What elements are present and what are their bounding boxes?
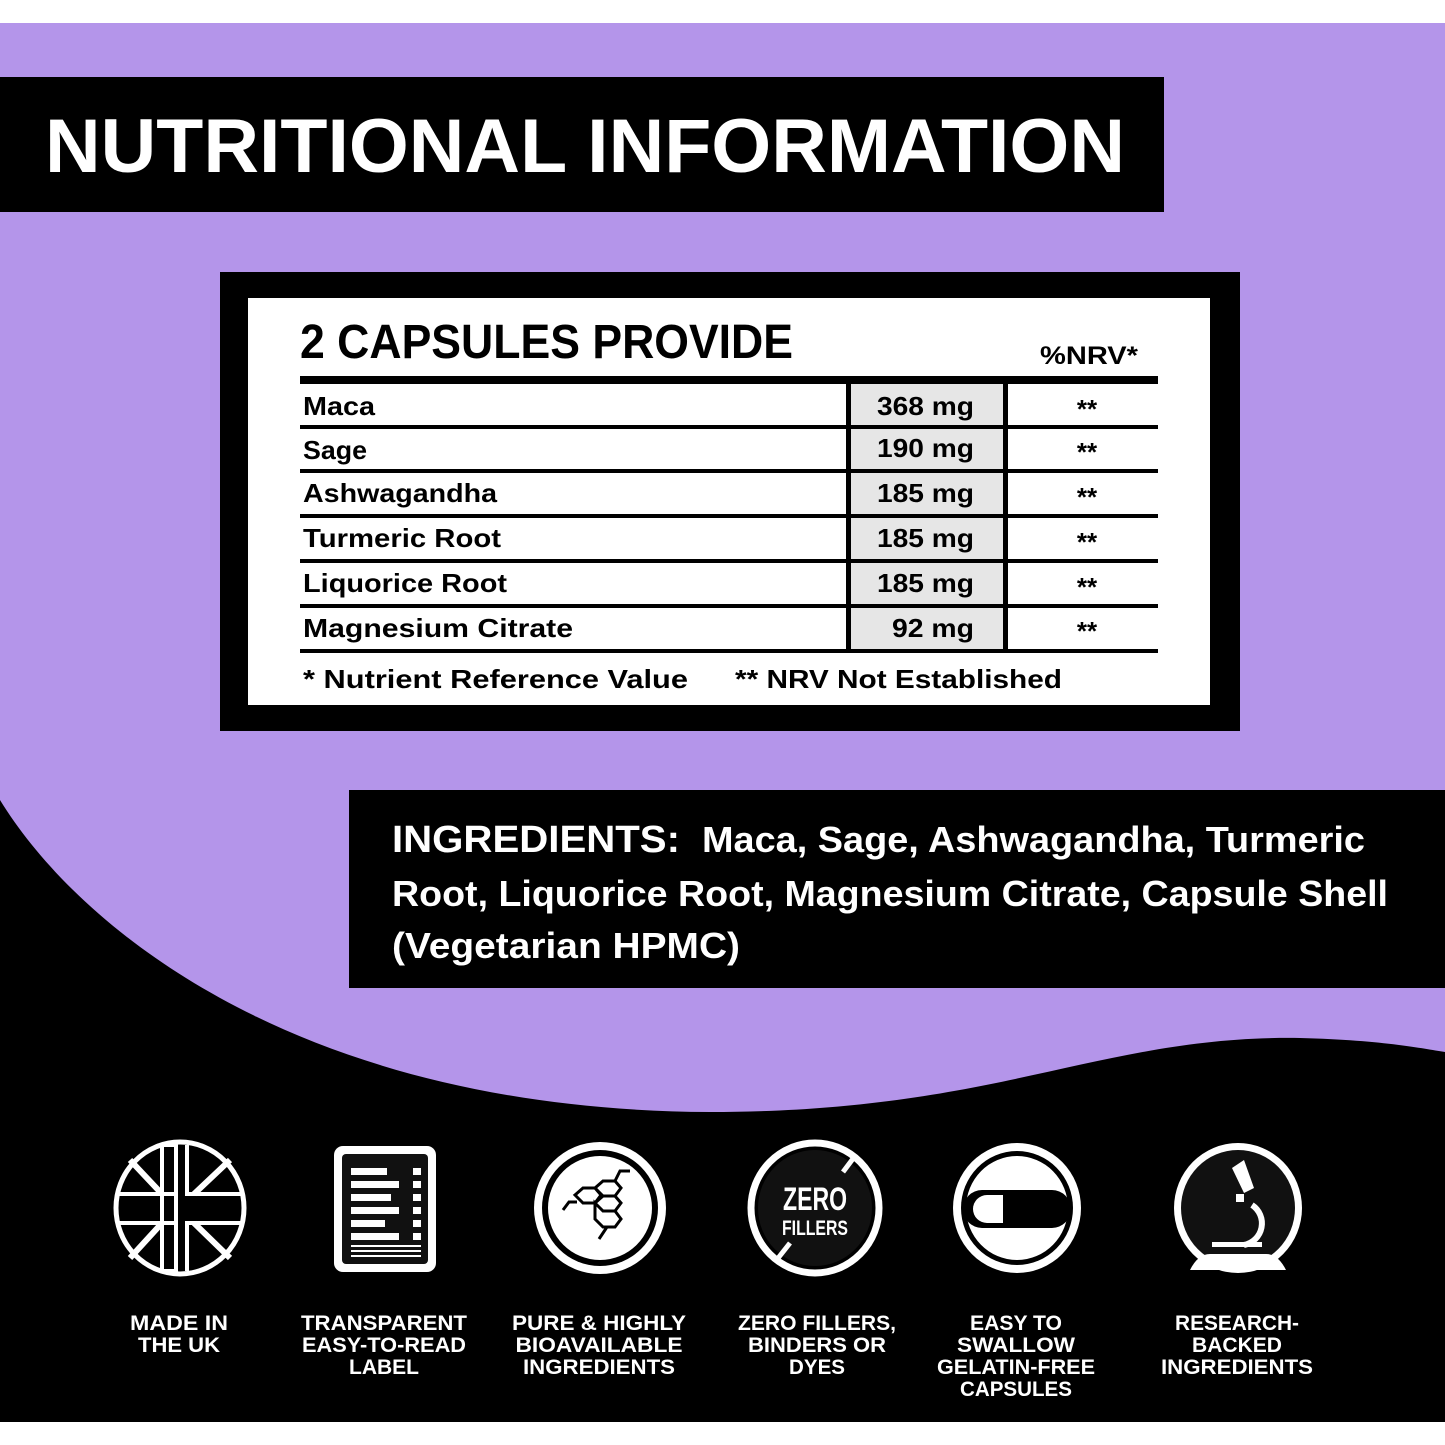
- feature labels: EASY-TO-READ: [302, 1334, 466, 1357]
- table rows: 92 mg: [892, 613, 974, 643]
- panel: ingredients: (Vegetarian HPMC): [392, 925, 740, 966]
- label: made in uk: MADE IN: [130, 1312, 228, 1335]
- feature labels: INGREDIENTS: [1161, 1356, 1313, 1379]
- table rows: 368 mg: [877, 391, 974, 421]
- feature labels: THE UK: [138, 1334, 220, 1357]
- table rows: 185 mg: [877, 478, 974, 508]
- feature labels: [130, 1312, 1313, 1401]
- table rows: **: [1077, 437, 1098, 467]
- table rows: 185 mg: [877, 523, 974, 553]
- icon: label document: [334, 1146, 436, 1272]
- table rows: **: [1077, 482, 1098, 512]
- panel: nutrition table: [220, 272, 1240, 731]
- feature labels: SWALLOW: [957, 1334, 1075, 1357]
- table heading: 2 CAPSULES PROVIDE: [300, 316, 793, 369]
- table footnotes: * Nutrient Reference Value: [303, 664, 688, 694]
- feature labels: CAPSULES: [960, 1378, 1072, 1401]
- label: research backed: RESEARCH-: [1175, 1312, 1299, 1335]
- table rows: Ashwagandha: [303, 478, 498, 508]
- feature labels: GELATIN-FREE: [937, 1356, 1095, 1379]
- table rows: [300, 384, 1158, 653]
- feature labels: BINDERS OR: [748, 1334, 886, 1357]
- table footnotes: ** NRV Not Established: [735, 664, 1062, 694]
- icon: molecule: [534, 1142, 666, 1274]
- table rows: Magnesium Citrate: [303, 613, 573, 643]
- feature labels: BIOAVAILABLE: [516, 1334, 682, 1357]
- table rows: Maca: [303, 391, 376, 421]
- feature labels: LABEL: [349, 1356, 419, 1379]
- panel: ingredients: [349, 790, 1445, 988]
- title: [0, 77, 1164, 212]
- icon: zero fillers: FILLERS: [782, 1217, 848, 1240]
- icon: zero fillers: [751, 1143, 879, 1273]
- table rows: **: [1077, 527, 1098, 557]
- title: NUTRITIONAL INFORMATION: [45, 104, 1125, 189]
- icon: microscope: [1174, 1143, 1302, 1273]
- panel: ingredients: Maca, Sage, Ashwagandha, Turmeric: [702, 819, 1365, 860]
- icon: capsule: [953, 1143, 1081, 1273]
- table rows: 185 mg: [877, 568, 974, 598]
- table rows: Turmeric Root: [303, 523, 501, 553]
- table rows: 190 mg: [877, 433, 974, 463]
- table rows: **: [1077, 394, 1098, 424]
- panel: ingredients: Root, Liquorice Root, Magnesium Citrate, Capsule Shell: [392, 873, 1388, 914]
- table footnotes: [303, 664, 1062, 694]
- label: easy to swallow: EASY TO: [970, 1312, 1062, 1335]
- panel: ingredients: INGREDIENTS:: [392, 819, 680, 861]
- table rows: Sage: [303, 435, 367, 465]
- table rows: **: [1077, 572, 1098, 602]
- label: transparent label: TRANSPARENT: [301, 1312, 467, 1335]
- icon: zero fillers: ZERO: [783, 1181, 847, 1217]
- column heading: %NRV: %NRV*: [1040, 342, 1138, 370]
- table rows: **: [1077, 616, 1098, 646]
- label: pure ingredients: PURE & HIGHLY: [512, 1312, 686, 1335]
- label: zero fillers: ZERO FILLERS,: [738, 1312, 896, 1335]
- feature labels: BACKED: [1192, 1334, 1282, 1357]
- table rows: Liquorice Root: [303, 568, 507, 598]
- feature labels: DYES: [789, 1356, 845, 1379]
- icon: union flag circle: [116, 1142, 244, 1274]
- feature labels: INGREDIENTS: [523, 1356, 675, 1379]
